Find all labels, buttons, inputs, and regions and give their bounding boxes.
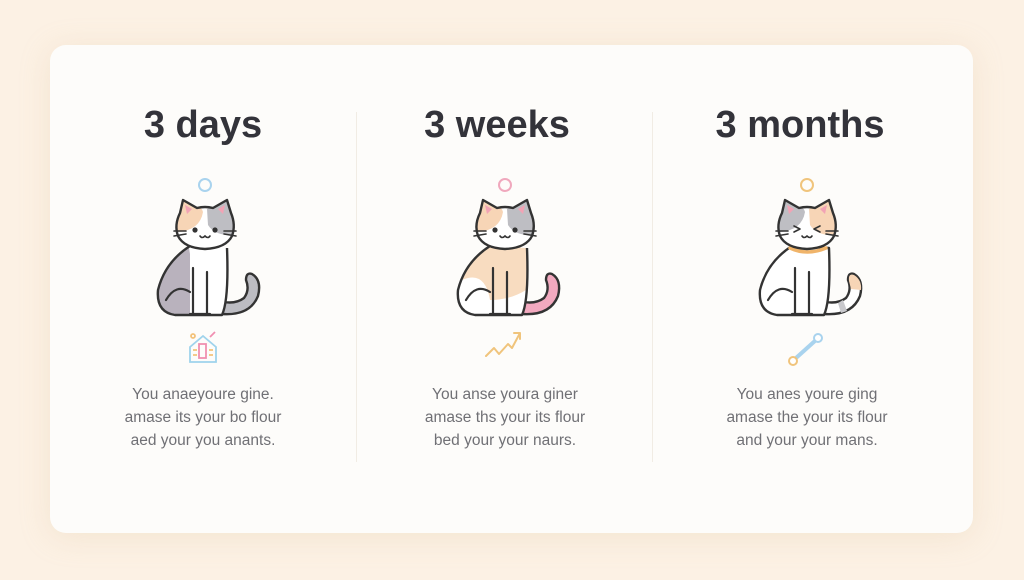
text: panel 3: amase the your its flour <box>726 409 888 426</box>
text: panel 2: amase ths your its flour <box>425 409 585 426</box>
card <box>50 45 973 533</box>
title: 3 months: 3 months <box>716 104 884 146</box>
title: 3 days: 3 days <box>144 104 262 146</box>
cat 3 <box>760 179 861 315</box>
title: 3 weeks: 3 weeks <box>424 104 570 146</box>
text: panel 2: bed your your naurs. <box>434 432 576 449</box>
text: panel 2 <box>425 386 585 449</box>
text: panel 1: aed your you anants. <box>131 432 275 449</box>
icon: growth arrow <box>486 333 520 356</box>
text: panel 3: and your your mans. <box>736 432 878 449</box>
icon: house <box>190 332 216 362</box>
text: panel 1: amase its your bo flour <box>125 409 281 426</box>
cat 2 <box>458 179 559 315</box>
text: panel 1 <box>125 386 282 449</box>
text: panel 2: You anse youra giner <box>432 386 578 403</box>
text: panel 1: You anaeyoure gine. <box>132 386 274 403</box>
icon: link <box>789 334 822 365</box>
cat 1 <box>158 179 259 315</box>
text: panel 3 <box>726 386 888 449</box>
text: panel 3: You anes youre ging <box>737 386 877 403</box>
